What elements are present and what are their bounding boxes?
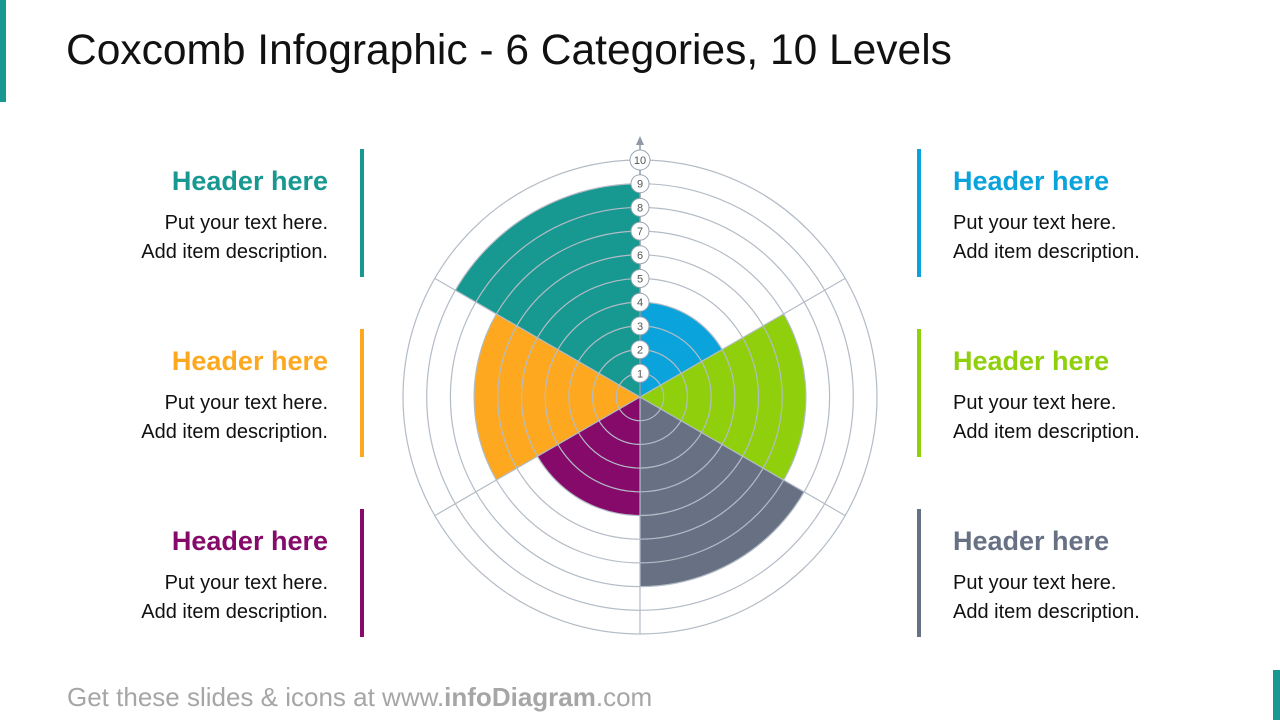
level markers: 10 [634, 155, 646, 167]
text block: green: Add item description. [953, 421, 1140, 443]
footer: Get these slides & icons at www.infoDiagram.com [67, 682, 652, 712]
level markers: 1 [637, 368, 643, 380]
text block: gray: Header here [953, 526, 1109, 556]
text block: orange [141, 346, 328, 443]
text block: teal: Add item description. [141, 241, 328, 263]
text block: gray: Put your text here. [953, 572, 1116, 594]
sector: blue [640, 302, 722, 397]
sector: gray [640, 397, 804, 587]
text block: blue: Header here [953, 166, 1109, 196]
text block: purple: Put your text here. [165, 572, 328, 594]
level markers: 7 [637, 226, 643, 238]
text block: orange: Add item description. [141, 421, 328, 443]
bar: teal [360, 149, 364, 277]
sector: teal [456, 184, 640, 397]
sector: orange [474, 314, 640, 480]
bar: orange [360, 329, 364, 457]
level markers: 2 [637, 345, 643, 357]
text block: orange: Header here [172, 346, 328, 376]
level markers: 8 [637, 202, 643, 214]
text block: gray: Add item description. [953, 601, 1140, 623]
level markers: 9 [637, 179, 643, 191]
text block: blue [953, 166, 1140, 263]
bar: purple [360, 509, 364, 637]
title: Coxcomb Infographic - 6 Categories, 10 Levels [66, 27, 952, 74]
bar: blue [917, 149, 921, 277]
text block: purple: Add item description. [141, 601, 328, 623]
axis with arrow [636, 136, 644, 397]
text block: purple: Header here [172, 526, 328, 556]
text block: purple [141, 526, 328, 623]
text block: teal: Put your text here. [165, 212, 328, 234]
level markers: 5 [637, 274, 643, 286]
text block: green: Header here [953, 346, 1109, 376]
text block: orange: Put your text here. [165, 392, 328, 414]
level markers: 4 [637, 297, 643, 309]
text block: blue: Put your text here. [953, 212, 1116, 234]
bar: gray [917, 509, 921, 637]
accent: top-left [0, 0, 6, 102]
accent: bottom-right [1273, 670, 1280, 720]
text block: green: Put your text here. [953, 392, 1116, 414]
sector: green [640, 314, 806, 480]
level markers [630, 150, 650, 382]
level markers: 3 [637, 321, 643, 333]
level markers: 6 [637, 250, 643, 262]
text block: gray [953, 526, 1140, 623]
sector: purple [537, 397, 640, 516]
text block: teal [141, 166, 328, 263]
text block: green [953, 346, 1140, 443]
text block: teal: Header here [172, 166, 328, 196]
bar: green [917, 329, 921, 457]
text block: blue: Add item description. [953, 241, 1140, 263]
